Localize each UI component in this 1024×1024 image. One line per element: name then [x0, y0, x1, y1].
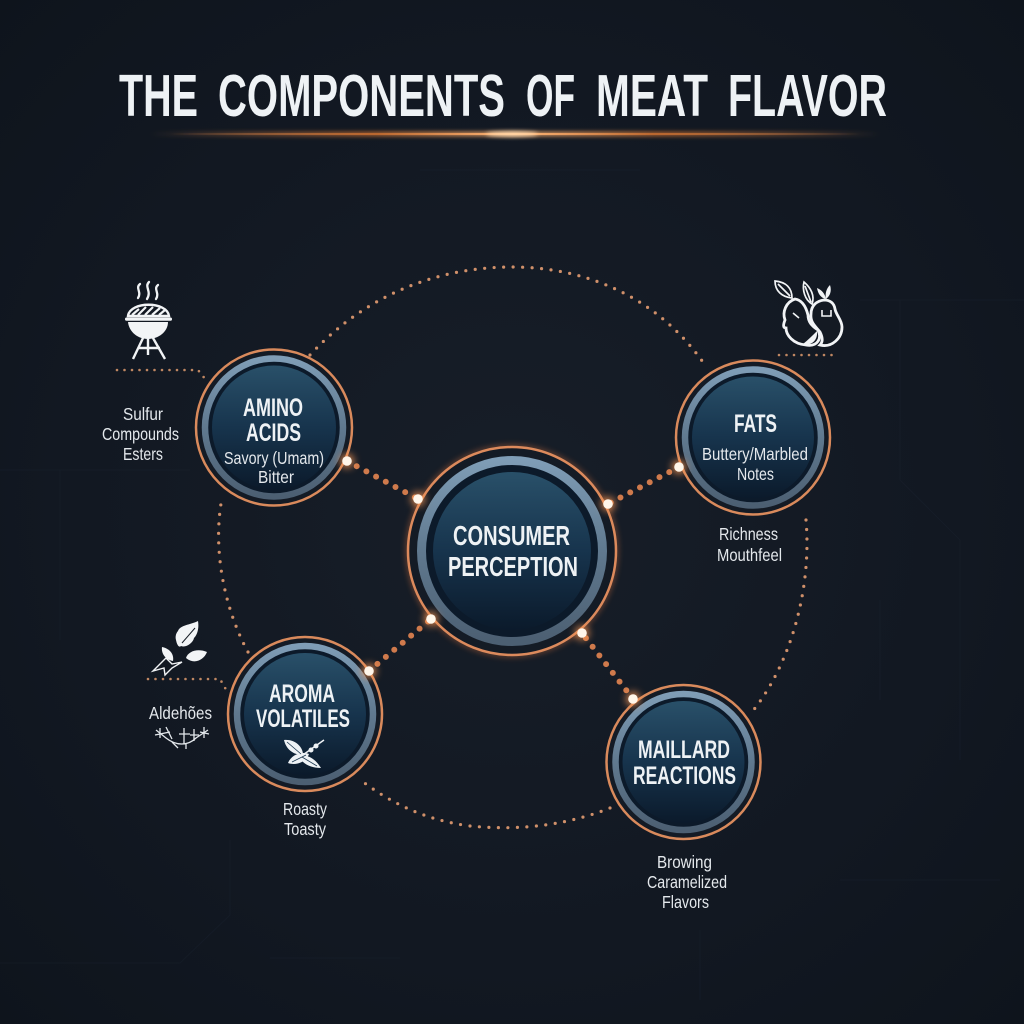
node: consumer perception: PERCEPTION [448, 551, 578, 582]
node: amino acids: Bitter [258, 467, 294, 487]
node: aroma volatiles: AROMA [269, 680, 335, 708]
label: sulfur compounds esters: Sulfur [123, 404, 163, 424]
label: richness mouthfeel [717, 524, 782, 565]
label: browning caramelized flavors: Caramelized [647, 872, 727, 892]
label: sulfur compounds esters [102, 404, 179, 464]
node: maillard reactions: MAILLARD [638, 736, 730, 764]
label: aldehydes: Aldehões [149, 703, 212, 723]
title: THE [119, 63, 198, 129]
node: aroma volatiles: VOLATILES [256, 705, 350, 733]
icon: herb sprig [155, 727, 209, 749]
label: roasty toasty: Roasty [283, 799, 327, 819]
node: consumer perception: CONSUMER [453, 520, 570, 551]
outer dotted ring [219, 267, 807, 828]
node: fats: Buttery/Marbled [702, 444, 808, 464]
node: maillard reactions [606, 685, 760, 839]
label: browning caramelized flavors: Browing [657, 852, 712, 872]
label: sulfur compounds esters: Esters [123, 444, 163, 464]
node: maillard reactions: REACTIONS [633, 762, 736, 790]
node: amino acids [196, 350, 352, 506]
label: sulfur compounds esters: Compounds [102, 424, 179, 444]
icon: leaves [153, 621, 207, 675]
label: roasty toasty: Toasty [284, 819, 326, 839]
title: COMPONENTS [218, 63, 505, 129]
title [119, 63, 887, 129]
icon: grill [125, 282, 172, 359]
title: MEAT [596, 63, 708, 129]
label: roasty toasty [283, 799, 327, 839]
node: fats: Notes [737, 464, 774, 484]
label: browning caramelized flavors [647, 852, 727, 912]
node: amino acids: ACIDS [246, 419, 301, 447]
node: amino acids: AMINO [243, 394, 303, 422]
node: fats: FATS [734, 410, 777, 438]
title: FLAVOR [728, 63, 887, 129]
side dotted leaders [117, 355, 834, 693]
node: consumer perception [408, 447, 616, 655]
node: fats [676, 360, 830, 514]
node: amino acids: Savory (Umam) [224, 448, 324, 468]
icon: fruit [775, 281, 842, 346]
title: OF [526, 63, 575, 129]
label: richness mouthfeel: Richness [719, 524, 778, 544]
icon: herb skewer [284, 740, 324, 768]
glowing junction dots [340, 454, 686, 706]
node: aroma volatiles [228, 637, 382, 791]
connectors [347, 461, 679, 699]
label: browning caramelized flavors: Flavors [662, 892, 709, 912]
label: richness mouthfeel: Mouthfeel [717, 545, 782, 565]
title underline glow [150, 132, 880, 136]
